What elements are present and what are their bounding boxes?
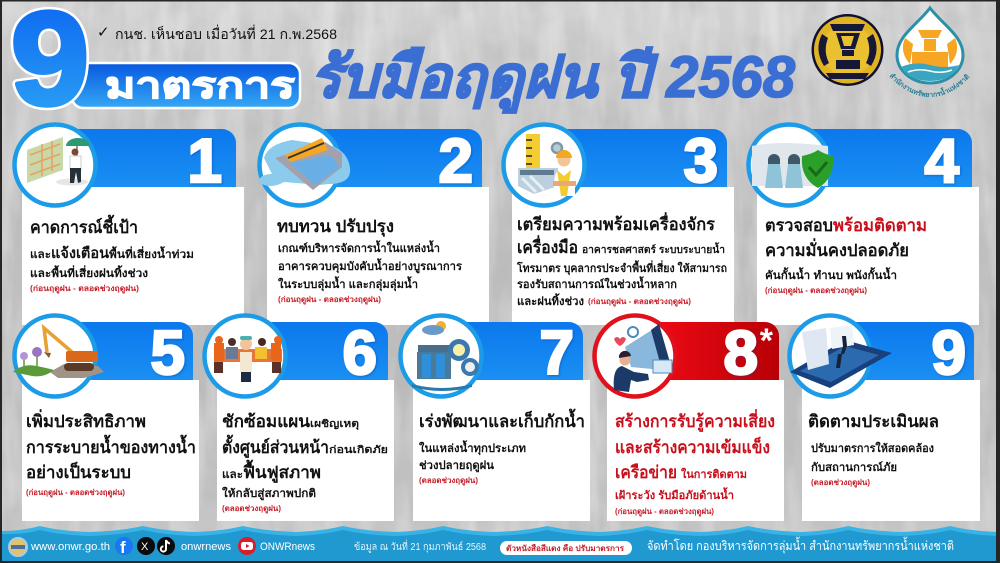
icon: dam and reservoir (258, 124, 350, 206)
number 1: 1 (188, 127, 222, 196)
text block 2: เกณฑ์บริหารจัดการน้ำในแหล่งน้ำ (278, 240, 440, 255)
icon: dam with gears and weather (400, 316, 482, 396)
text block 1: พื้นที่เสี่ยงน้ำท่วม (109, 246, 194, 261)
text block 7 (419, 408, 585, 486)
text block 7: เร่งพัฒนาและเก็บกักน้ำ (419, 408, 585, 431)
text block 9: กับสถานการณ์ภัย (811, 461, 897, 474)
text block 9: ติดตามประเมินผล (808, 412, 939, 431)
text block 1: แจ้งเตือน (51, 245, 109, 262)
text block 4: ความมั่นคงปลอดภัย (765, 238, 909, 260)
text block 6: ชักซ้อมแผน (222, 412, 310, 431)
text block 6: เผชิญเหตุ (310, 418, 359, 430)
number 2: 2 (439, 127, 473, 196)
approval note: กนช. เห็นชอบ เมื่อวันที่ 21 ก.พ.2568 (115, 25, 337, 42)
icon: website globe (9, 538, 27, 556)
text block 8: (ก่อนฤดูฝน - ตลอดช่วงฤดูฝน) (615, 507, 714, 517)
number 8 with asterisk (724, 319, 774, 388)
text block 7: ช่วงปลายฤดูฝน (419, 459, 494, 473)
text block 6: และ (222, 469, 243, 481)
icon: youtube (238, 537, 256, 555)
text block 6: ฟื้นฟูสภาพ (243, 459, 321, 484)
icon: monitoring dashboards on platform (790, 316, 892, 396)
text block 5 (26, 409, 196, 498)
text block 3 (516, 212, 727, 308)
number 9: 9 (932, 319, 966, 388)
text block 9: ปรับมาตรการให้สอดคล้อง (811, 441, 934, 455)
text block 5: การระบายน้ำของทางน้ำ (26, 434, 196, 457)
icon: excavator and water hyacinth (13, 316, 104, 396)
icon: facebook: f (120, 538, 126, 557)
number 7: 7 (540, 319, 574, 388)
text block 2: (ก่อนฤดูฝน - ตลอดช่วงฤดูฝน) (278, 295, 381, 305)
text block 3: และฝนทิ้งช่วง (517, 293, 584, 308)
number 8 with asterisk: * (760, 322, 774, 360)
panel 7 (400, 316, 590, 521)
text block 2: ในระบบลุ่มน้ำ และกลุ่มลุ่มน้ำ (278, 276, 418, 292)
panel 6 (204, 316, 394, 521)
text block 6: ตั้งศูนย์ส่วนหน้า (222, 434, 329, 459)
text block 5: อย่างเป็นระบบ (26, 460, 131, 482)
text block 3: โทรมาตร บุคลากรประจำพื้นที่เสี่ยง ให้สามารถ (516, 260, 727, 276)
text block 1: และพื้นที่เสี่ยงฝนทิ้งช่วง (30, 265, 148, 280)
producer credit: จัดทำโดย กองบริหารจัดการลุ่มน้ำ สำนักงานทรัพยากรน้ำแห่งชาติ (647, 536, 954, 554)
text block 8: และสร้างความเข้มแข็ง (615, 435, 770, 457)
text block 3: รองรับสถานการณ์ในช่วงน้ำหลาก (517, 276, 677, 291)
text block 3: เครื่องมือ (517, 235, 578, 257)
icon: response team (204, 316, 286, 396)
panel 1 (14, 124, 244, 325)
text block 7: ในแหล่งน้ำทุกประเภท (419, 440, 526, 456)
text block 6: (ตลอดช่วงฤดูฝน) (222, 504, 281, 514)
social handle onwrnews: onwrnews (181, 541, 231, 553)
panel 3 (504, 124, 734, 325)
panel 5 (13, 316, 199, 521)
logo: ONWR water drop: สำนักงานทรัพยากรน้ำแห่งชาติ (890, 74, 970, 98)
panel 8 (highlighted red) (594, 316, 784, 521)
logo: ONWR water drop (890, 6, 970, 98)
text block 4: (ก่อนฤดูฝน - ตลอดช่วงฤดูฝน) (765, 286, 867, 296)
text block 1: (ก่อนฤดูฝน - ตลอดช่วงฤดูฝน) (30, 284, 139, 294)
text block 7: (ตลอดช่วงฤดูฝน) (419, 476, 478, 486)
text block 1: และ (30, 249, 51, 261)
text block 6 (222, 412, 388, 514)
text block 8: เครือข่าย (615, 462, 677, 482)
icon: megaphone (594, 316, 676, 396)
text block 2: ทบทวน ปรับปรุง (277, 217, 394, 237)
number 3: 3 (684, 127, 718, 196)
text block 8 (615, 409, 775, 517)
icon: X: X (141, 541, 149, 553)
text block 8: เฝ้าระวัง รับมือภัยด้านน้ำ (615, 487, 734, 502)
text block 3: เตรียมความพร้อมเครื่องจักร (517, 212, 716, 234)
logo: government seal (812, 14, 884, 86)
main heading: รับมือฤดูฝน ปี 2568 (310, 45, 796, 114)
text block 5: เพิ่มประสิทธิภาพ (26, 409, 146, 431)
text block 4: พร้อมติดตาม (833, 216, 927, 235)
approval note: ✓ (97, 23, 110, 41)
text block 4 (765, 216, 927, 296)
text block 3: (ก่อนฤดูฝน - ตลอดช่วงฤดูฝน) (588, 297, 691, 307)
text block 2 (277, 217, 462, 305)
icon: tiktok (157, 537, 175, 555)
icon: dam outlets with green shield (748, 124, 833, 206)
youtube handle: ONWRnews (260, 541, 315, 553)
text block 9 (808, 412, 939, 488)
text block 2: อาคารควบคุมบังคับน้ำอย่างบูรณาการ (278, 258, 462, 274)
text block 4: ตรวจสอบ (765, 216, 833, 235)
text block 8: ในการติดตาม (681, 467, 747, 481)
text block 9: (ตลอดช่วงฤดูฝน) (811, 478, 870, 488)
title pill: มาตรการ: มาตรการ (105, 65, 295, 106)
website address: www.onwr.go.th (30, 541, 110, 553)
number 8 with asterisk: 8 (724, 319, 758, 388)
icon: facebook (115, 537, 133, 557)
number 5: 5 (151, 319, 185, 388)
text block 8: สร้างการรับรู้ความเสี่ยง (615, 409, 775, 433)
text block 6: ให้กลับสู่สภาพปกติ (222, 486, 316, 501)
text block 1 (30, 214, 194, 294)
text block 1: คาดการณ์ชี้เป้า (30, 214, 138, 237)
number 6: 6 (343, 319, 377, 388)
text block 3: อาคารชลศาสตร์ ระบบระบายน้ำ (582, 242, 725, 256)
panel 9 (790, 316, 980, 521)
legend pill (500, 541, 632, 555)
panel 2 (258, 124, 489, 325)
text block 5: (ก่อนฤดูฝน - ตลอดช่วงฤดูฝน) (26, 488, 125, 498)
icon: engineer with dam (504, 124, 584, 206)
text block 6: ก่อนเกิดภัย (329, 444, 388, 456)
text block 4: คันกั้นน้ำ ทำนบ พนังกั้นน้ำ (765, 267, 897, 282)
footer bar (0, 526, 1000, 561)
title pill: มาตรการ (72, 63, 300, 108)
icon: forecast map with person under umbrella (14, 124, 96, 206)
icon: X (137, 537, 155, 555)
panel 4 (748, 124, 979, 325)
legend pill: ตัวหนังสือสีแดง คือ ปรับมาตรการ (506, 543, 625, 553)
title block (11, 0, 796, 132)
data date: ข้อมูล ณ วันที่ 21 กุมภาพันธ์ 2568 (354, 539, 486, 553)
number 4: 4 (925, 127, 960, 196)
